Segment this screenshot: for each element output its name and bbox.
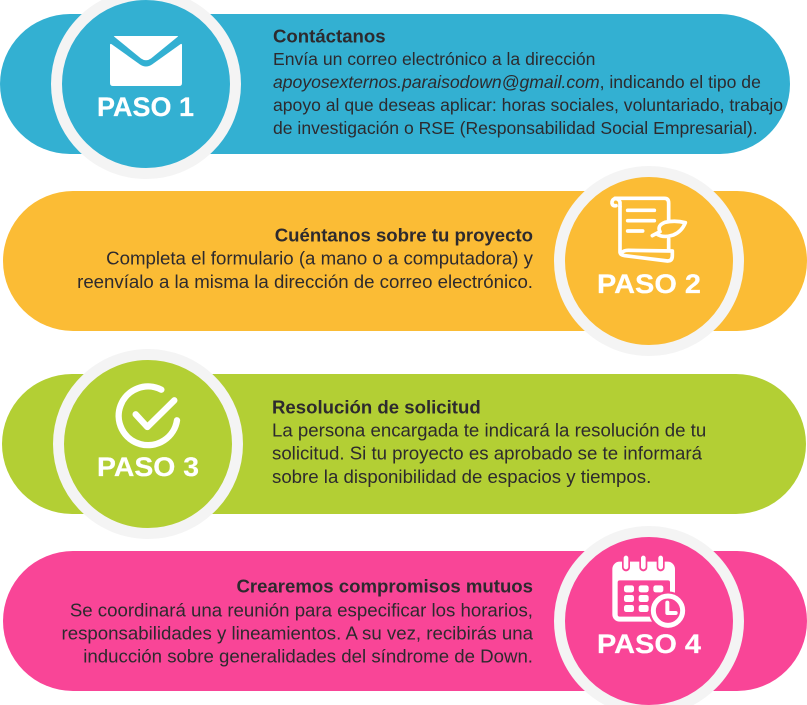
icon: scroll with leaf	[612, 198, 685, 261]
text block: contáctanos	[273, 26, 783, 138]
panel: paso 4	[3, 532, 807, 705]
text block: contáctanos: de investigación o RSE (Responsabilidad Social Empresarial).	[273, 118, 758, 138]
icon: check circle	[119, 386, 177, 445]
label: paso 3: PASO 3	[97, 452, 199, 482]
text block: compromisos: Se coordinará una reunión para especificar los horarios,	[70, 600, 533, 620]
text block: contáctanos: apoyo al que deseas aplicar: horas sociales, voluntariado, trabajo	[273, 95, 783, 115]
text block: resolución: La persona encargada te indicará la resolución de tu	[272, 420, 706, 440]
text block: contáctanos: Envía un correo electrónico a la dirección	[273, 49, 595, 69]
label: paso 1: PASO 1	[97, 92, 194, 122]
text block: resolución: sobre la disponibilidad de espacios y tiempos.	[272, 466, 651, 487]
panel: paso 1	[0, 0, 790, 174]
badge circle: paso 4	[560, 532, 738, 705]
pill background: paso 3	[2, 374, 806, 514]
text block: contáctanos: Contáctanos	[273, 26, 386, 46]
text block: compromisos: Crearemos compromisos mutuos	[236, 576, 533, 596]
text block: contáctanos: apoyosexternos.paraisodown@gmail.com, indicando el tipo de	[273, 72, 761, 92]
text block: compromisos	[62, 576, 534, 666]
text block: resolución: solicitud. Si tu proyecto es aprobado se te informará	[272, 442, 703, 464]
text block: cuéntanos	[77, 224, 534, 292]
pill background: paso 1	[0, 14, 790, 154]
pill background: paso 2	[3, 191, 807, 331]
text block: resolución	[272, 396, 706, 487]
label: paso 2: PASO 2	[597, 269, 701, 299]
text block: cuéntanos: Completa el formulario (a mano o a computadora) y	[106, 248, 534, 268]
panel: paso 3	[2, 354, 806, 534]
panel: paso 2	[3, 172, 807, 350]
text block: resolución: Resolución de solicitud	[272, 396, 481, 418]
label: paso 4: PASO 4	[597, 629, 701, 659]
badge circle: paso 3	[58, 354, 238, 534]
text block: compromisos: inducción sobre generalidades del síndrome de Down.	[83, 646, 533, 666]
icon: calendar with clock	[612, 558, 687, 630]
icon: envelope	[110, 36, 182, 86]
text block: compromisos: responsabilidades y lineamientos. A su vez, recibirás una	[62, 622, 534, 644]
badge circle: paso 1	[56, 0, 236, 174]
badge circle: paso 2	[560, 172, 738, 350]
text block: cuéntanos: Cuéntanos sobre tu proyecto	[275, 224, 533, 246]
text block: cuéntanos: reenvíalo a la misma la dirección de correo electrónico.	[77, 271, 533, 292]
pill background: paso 4	[3, 551, 807, 691]
